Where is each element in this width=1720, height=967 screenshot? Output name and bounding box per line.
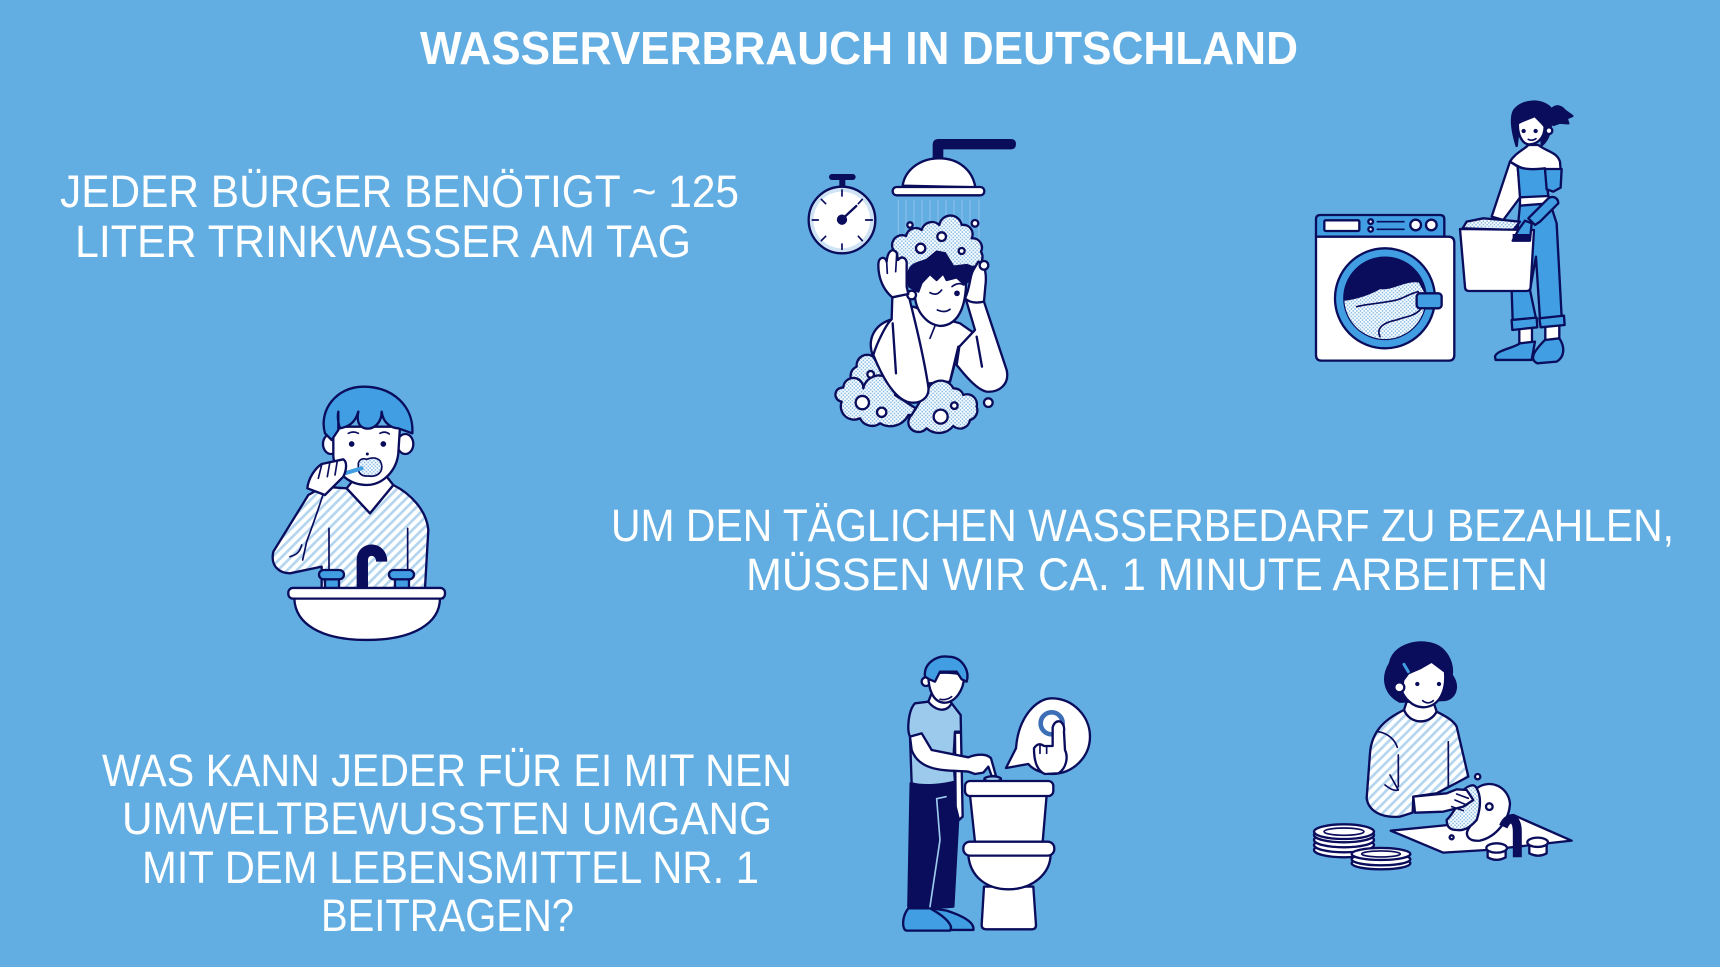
icon: shower arm [933, 139, 1016, 162]
text block: daily drinking water per citizen: LITER TRINKWASSER AM TAG [75, 216, 691, 267]
icon: neck [1404, 702, 1437, 721]
icon: foam lower left [851, 355, 895, 400]
icon: bubbles [856, 220, 993, 424]
text block: question: WAS KANN JEDER FÜR EI MIT NEN [102, 745, 792, 796]
icon: hair clip [1404, 664, 1408, 672]
icon: face [333, 427, 400, 485]
icon: head [1512, 102, 1572, 146]
icon: facial features [1416, 683, 1440, 703]
icon: speech bubble with flush button [1006, 698, 1090, 774]
icon: hands [878, 250, 986, 303]
icon: boy brushing teeth at sink [273, 387, 445, 640]
icon: neck [347, 477, 393, 513]
text block: question: MIT DEM LEBENSMITTEL NR. 1 [142, 842, 759, 893]
icon: faucet handles [319, 570, 414, 588]
icon: sweater [1367, 710, 1468, 817]
icon: trousers [1512, 203, 1562, 320]
icon: woman washing dishes [1314, 642, 1572, 869]
icon: hand [307, 459, 346, 495]
title: WASSERVERBRAUCH IN DEUTSCHLAND [420, 22, 1298, 74]
icon: hair [1385, 642, 1456, 702]
icon: facial features [930, 284, 964, 338]
icon: shirt [908, 702, 961, 785]
icon: laundry basket [1460, 218, 1534, 291]
icon: stopwatch [809, 174, 875, 253]
icon: faucet [1503, 819, 1517, 857]
icon: plate stacks [1314, 824, 1410, 869]
icon: ears [323, 434, 413, 454]
icon: washing machine [1316, 215, 1454, 361]
icon: sweater [273, 485, 428, 588]
icon: faucet [362, 550, 382, 588]
icon: hair [908, 252, 973, 292]
icon: plate being washed [1467, 784, 1510, 841]
icon: hair [324, 387, 412, 440]
text block: cost of daily water: MÜSSEN WIR CA. 1 MINUTE ARBEITEN [746, 549, 1548, 600]
icon: arms [910, 733, 996, 820]
icon: left arm [873, 293, 929, 403]
icon: man showering with stopwatch [809, 139, 1016, 433]
text block: question: UMWELTBEWUSSTEN UMGANG [122, 793, 772, 844]
icon: face [1402, 662, 1445, 707]
icon: head [922, 656, 967, 710]
text block: question: BEITRAGEN? [321, 890, 574, 941]
icon: woman doing laundry at washing machine [1316, 102, 1572, 363]
icon: trousers [908, 782, 958, 908]
icon: toilet [963, 776, 1054, 929]
icon: face [915, 273, 966, 326]
icon: foam lower clouds [835, 375, 977, 433]
icon: toothpaste foam [358, 458, 382, 476]
icon: right arm [957, 297, 1007, 392]
icon: shoes [1495, 325, 1563, 363]
text block: daily drinking water per citizen: JEDER BÜRGER BENÖTIGT ~ 125 [60, 166, 739, 217]
icon: sink bowl [288, 588, 445, 640]
icon: shower head [893, 158, 984, 195]
icon: shoes [903, 908, 973, 931]
text block: cost of daily water [611, 500, 1674, 600]
icon: toothbrush [315, 468, 362, 482]
icon: faucet knobs [1486, 838, 1548, 860]
icon: upper body [1492, 145, 1562, 225]
icon: foam on head [892, 216, 983, 273]
icon: facial features [348, 432, 389, 455]
icon: man flushing toilet [903, 656, 1090, 931]
icon: sponge and hand [1413, 785, 1480, 830]
icon: torso [871, 307, 977, 387]
icon: water streams [898, 200, 979, 247]
text block: question [102, 745, 792, 941]
icon: counter [1391, 815, 1572, 853]
text block: daily drinking water per citizen [60, 166, 739, 267]
